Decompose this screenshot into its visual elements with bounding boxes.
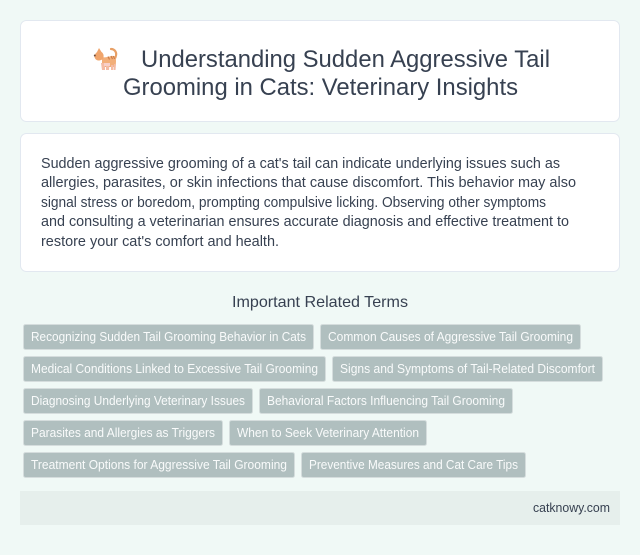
description text	[41, 156, 576, 250]
title	[123, 46, 550, 101]
footer site name: catknowy.com	[533, 501, 610, 515]
chip: Diagnosing Underlying Veterinary Issues	[31, 394, 245, 408]
chip	[332, 356, 602, 382]
chip	[24, 356, 326, 382]
chip: Common Causes of Aggressive Tail Grooming	[328, 330, 573, 344]
chip: Preventive Measures and Cat Care Tips	[309, 458, 518, 472]
chip: Recognizing Sudden Tail Grooming Behavior in Cats	[31, 330, 306, 344]
chip	[24, 420, 222, 446]
footer	[20, 491, 620, 525]
header panel	[20, 20, 620, 122]
chip	[260, 388, 512, 414]
chip: Signs and Symptoms of Tail-Related Discomfort	[340, 362, 595, 376]
chip	[24, 388, 252, 414]
chip	[302, 452, 526, 478]
description text: restore your cat's comfort and health.	[41, 234, 279, 250]
chip: When to Seek Veterinary Attention	[237, 426, 419, 440]
chip	[24, 324, 314, 350]
description text: and consulting a veterinarian ensures accurate diagnosis and effective treatment to	[41, 214, 569, 230]
related terms chips	[24, 324, 602, 478]
description text: signal stress or boredom, prompting compulsive licking. Observing other symptoms	[41, 195, 546, 211]
chip	[230, 420, 426, 446]
chip	[24, 452, 294, 478]
panel: description	[20, 134, 620, 272]
section heading: Important Related Terms	[232, 294, 408, 311]
chip: Behavioral Factors Influencing Tail Grooming	[267, 394, 505, 408]
title: Understanding Sudden Aggressive Tail	[141, 46, 550, 73]
chip	[320, 324, 580, 350]
chip: Parasites and Allergies as Triggers	[31, 426, 215, 440]
chip: Medical Conditions Linked to Excessive Tail Grooming	[31, 362, 318, 376]
description text: Sudden aggressive grooming of a cat's tail can indicate underlying issues such as	[41, 156, 560, 172]
description text: allergies, parasites, or skin infections that cause discomfort. This behavior may also	[41, 175, 576, 191]
icon: cat	[94, 48, 116, 70]
title: Grooming in Cats: Veterinary Insights	[123, 74, 518, 101]
chip: Treatment Options for Aggressive Tail Grooming	[31, 458, 287, 472]
